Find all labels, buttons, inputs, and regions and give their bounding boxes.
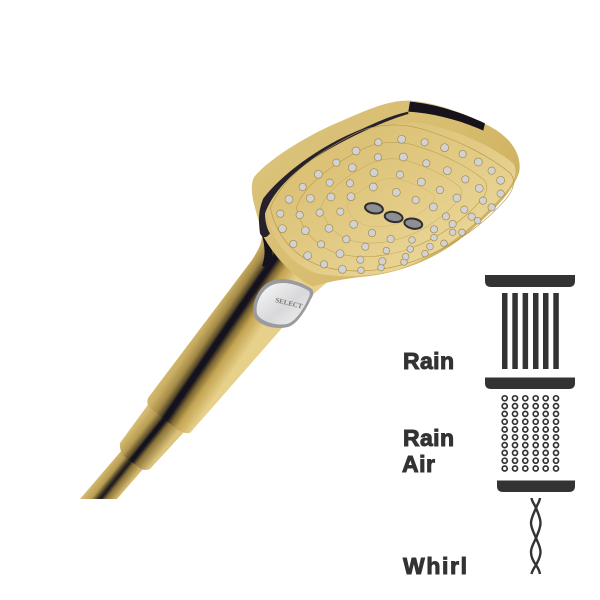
label: Rain: Rain xyxy=(403,348,454,374)
handle xyxy=(147,220,350,433)
button label: SELECT xyxy=(275,296,304,311)
face xyxy=(267,123,516,276)
icon: rain air spray xyxy=(485,378,575,471)
select button xyxy=(253,279,313,328)
label: Rain Air: Air xyxy=(402,451,435,477)
icon: rain spray xyxy=(485,275,575,369)
shower head illustration xyxy=(80,101,520,499)
head back shell xyxy=(252,101,520,287)
top dark reflection xyxy=(408,102,485,131)
face contour rings xyxy=(270,125,514,271)
label: Rain Air: Rain xyxy=(403,425,454,451)
neck dark reflection xyxy=(261,232,272,268)
icon: whirl spray xyxy=(497,480,575,574)
spray dots xyxy=(277,135,505,274)
hose xyxy=(80,450,144,499)
label: Rain Air xyxy=(402,425,454,477)
side dark reflection xyxy=(259,112,408,237)
label: Whirl: Whirl xyxy=(403,553,467,579)
handle collar xyxy=(120,402,184,470)
center nozzles xyxy=(364,202,423,230)
